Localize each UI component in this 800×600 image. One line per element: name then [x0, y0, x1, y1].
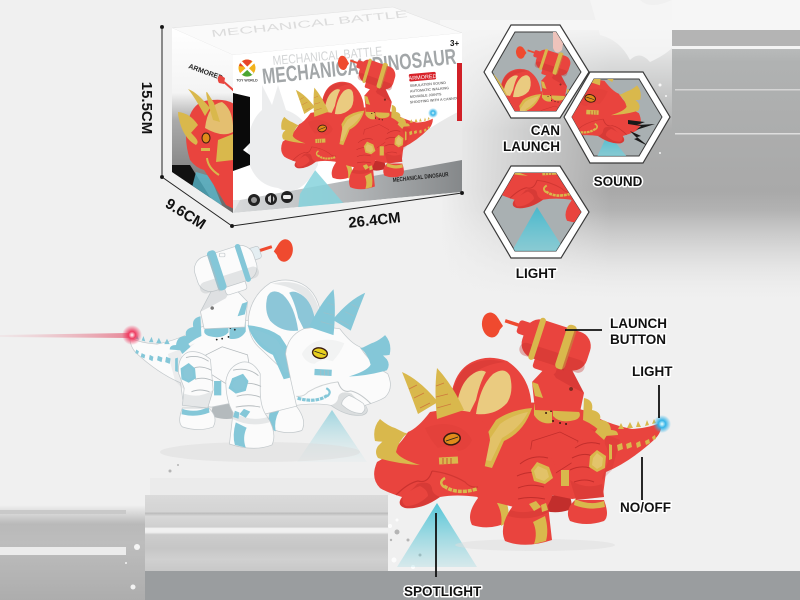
label: launch button: LAUNCH [610, 316, 667, 331]
box logo [236, 60, 258, 82]
label: spotlight: SPOTLIGHT [404, 584, 482, 599]
dimension: depth: 9.6CM [162, 195, 209, 233]
label: light (feature): LIGHT [516, 266, 557, 281]
label: launch button: BUTTON [610, 332, 666, 347]
dimension lines [160, 26, 464, 228]
red dinosaur [374, 305, 671, 551]
label: light: LIGHT [632, 364, 673, 379]
white dinosaur [122, 232, 390, 462]
label: sound: SOUND [594, 174, 643, 189]
box logo: TOY WORLD [236, 78, 258, 82]
box feature icons [248, 191, 293, 206]
spotlight cone: red dinosaur [397, 503, 477, 567]
label: no/off: NO/OFF [620, 500, 671, 515]
armored badge: ARMORED [408, 74, 437, 82]
box top face: MECHANICAL BATTLE [211, 9, 409, 40]
icon: sound bolts [628, 120, 655, 146]
box front face: SHOOTING WITH A CANNON [410, 96, 460, 104]
box front face: SIMULATION SOUND [410, 81, 446, 88]
box front face [233, 33, 462, 213]
box title: MECHANICAL BATTLE [272, 43, 383, 68]
tail light: red [122, 325, 142, 345]
label: can launch: CAN [531, 123, 560, 138]
box top face [172, 7, 462, 55]
hexagon: light [483, 165, 590, 259]
hexagon: can launch [483, 24, 590, 119]
callout lines [436, 330, 659, 577]
product box [172, 7, 462, 213]
box front face: AUTOMATIC WALKING [410, 86, 449, 93]
dimension: width: 26.4CM [348, 209, 402, 232]
box front face: MECHANICAL DINOSAUR [261, 44, 458, 89]
box front face: 3+ [450, 39, 459, 48]
spotlight cone: white dinosaur [297, 410, 367, 462]
ghost dinosaur [248, 85, 318, 191]
box dinosaur [281, 51, 433, 189]
box front face: MECHANICAL DINOSAUR [393, 172, 449, 184]
box left face [172, 28, 233, 213]
box left face: ARMORED [187, 63, 224, 82]
dimension: height: 15.5CM [138, 82, 155, 134]
box front face: MOVABLE JOINTS [410, 92, 442, 99]
label: can launch: LAUNCH [503, 139, 560, 154]
tail light: blue [653, 415, 671, 433]
hexagon: sound [563, 71, 671, 164]
